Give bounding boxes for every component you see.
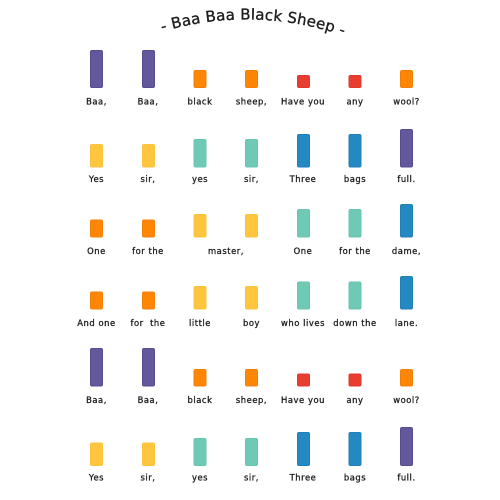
row 1: Baa, Baa, black sheep: wool? xyxy=(393,96,420,106)
row 3: One for the master, one for the dame: for the xyxy=(132,246,164,256)
row 2: Yes sir, yes sir, three bags full xyxy=(88,130,416,184)
row 6: Yes sir, yes sir, three bags full repeat xyxy=(88,428,416,482)
row 5: Baa, Baa, black sheep repeat: sheep, xyxy=(236,395,267,405)
row 4: And one for the little boy who lives down the lane: for the xyxy=(131,318,165,328)
row 5: Baa, Baa, black sheep repeat: black xyxy=(188,395,212,405)
row 4: And one for the little boy who lives down the lane: who lives xyxy=(281,318,325,328)
row 5: Baa, Baa, black sheep repeat: Have you xyxy=(281,395,325,405)
row 2: Yes sir, yes sir, three bags full: full. xyxy=(397,174,416,184)
row 6: Yes sir, yes sir, three bags full repeat: yes xyxy=(192,472,208,482)
row 1: Baa, Baa, black sheep: Have you xyxy=(281,96,325,106)
row 2: Yes sir, yes sir, three bags full: bags xyxy=(344,174,366,184)
row 4: And one for the little boy who lives down the lane xyxy=(77,276,418,328)
row 4: And one for the little boy who lives down the lane: And one xyxy=(77,318,116,328)
row 3: One for the master, one for the dame: One xyxy=(87,246,106,256)
row 1: Baa, Baa, black sheep: Baa, xyxy=(86,96,107,106)
row 3: One for the master, one for the dame: for the xyxy=(339,246,371,256)
title: - Baa Baa Black Sheep - xyxy=(162,8,344,34)
row 2: Yes sir, yes sir, three bags full: Three xyxy=(289,174,316,184)
row 6: Yes sir, yes sir, three bags full repeat: Three xyxy=(289,472,316,482)
row 6: Yes sir, yes sir, three bags full repeat: Yes xyxy=(88,472,104,482)
row 4: And one for the little boy who lives down the lane: down the xyxy=(333,318,377,328)
row 2: Yes sir, yes sir, three bags full: sir, xyxy=(244,174,259,184)
row 6: Yes sir, yes sir, three bags full repeat: full. xyxy=(397,472,416,482)
row 2: Yes sir, yes sir, three bags full: Yes xyxy=(88,174,104,184)
row 5: Baa, Baa, black sheep repeat: any xyxy=(346,395,364,405)
row 2: Yes sir, yes sir, three bags full: yes xyxy=(192,174,208,184)
row 1: Baa, Baa, black sheep: Baa, xyxy=(138,96,158,106)
row 2: Yes sir, yes sir, three bags full: sir, xyxy=(140,174,156,184)
row 3: One for the master, one for the dame: master, xyxy=(208,246,244,256)
row 1: Baa, Baa, black sheep: sheep, xyxy=(236,96,267,106)
row 4: And one for the little boy who lives down the lane: little xyxy=(189,318,211,328)
row 6: Yes sir, yes sir, three bags full repeat: sir, xyxy=(140,472,156,482)
row 1: Baa, Baa, black sheep xyxy=(86,50,420,106)
row 3: One for the master, one for the dame: One xyxy=(294,246,312,256)
row 1: Baa, Baa, black sheep: any xyxy=(346,96,364,106)
row 5: Baa, Baa, black sheep repeat xyxy=(86,348,420,405)
row 5: Baa, Baa, black sheep repeat: Baa, xyxy=(86,395,107,405)
row 6: Yes sir, yes sir, three bags full repeat: sir, xyxy=(244,472,259,482)
row 1: Baa, Baa, black sheep: black xyxy=(188,96,212,106)
row 4: And one for the little boy who lives down the lane: lane. xyxy=(395,318,418,328)
row 5: Baa, Baa, black sheep repeat: wool? xyxy=(393,395,420,405)
row 5: Baa, Baa, black sheep repeat: Baa, xyxy=(138,395,158,405)
row 6: Yes sir, yes sir, three bags full repeat: bags xyxy=(344,472,366,482)
row 4: And one for the little boy who lives down the lane: boy xyxy=(243,318,260,328)
row 3: One for the master, one for the dame: dame, xyxy=(392,246,421,256)
row 3: One for the master, one for the dame xyxy=(87,204,421,256)
